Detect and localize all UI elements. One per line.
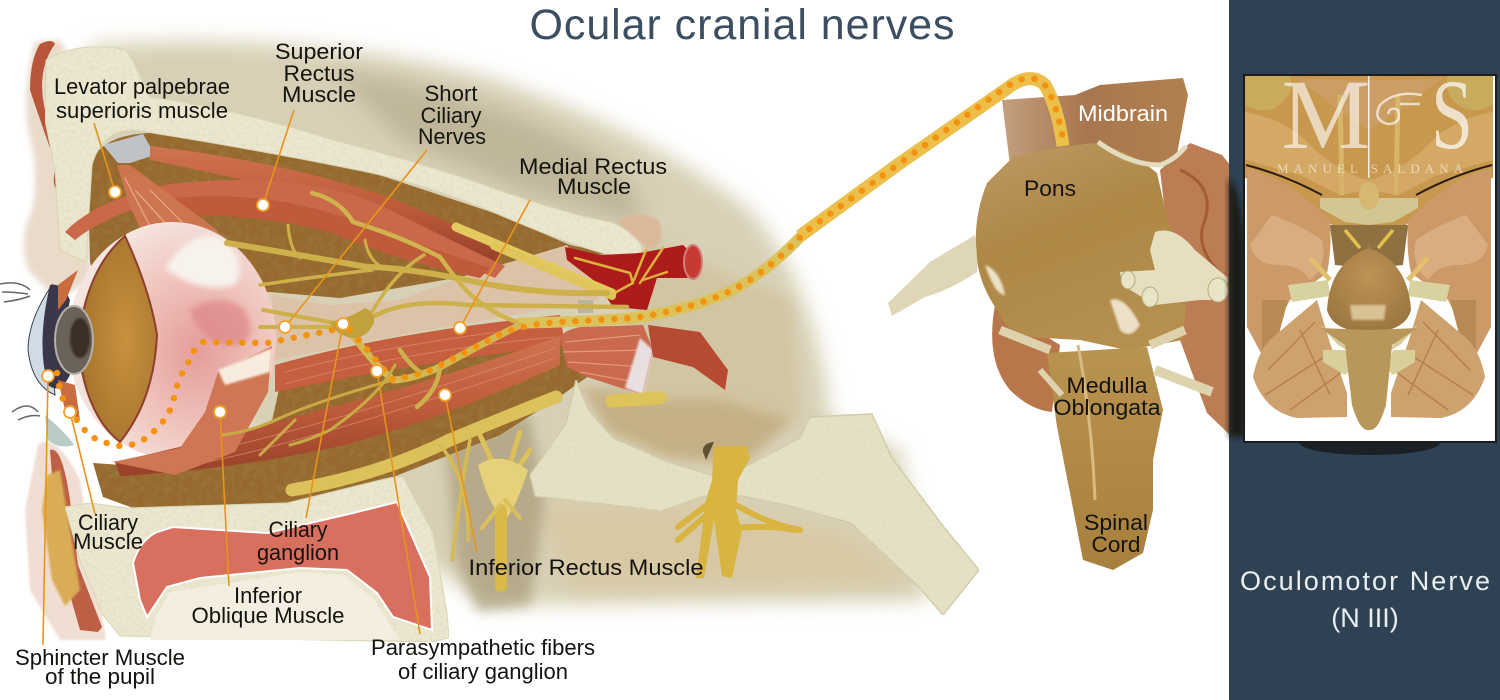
label: inferior oblique: Inferior: [234, 583, 302, 608]
medulla and spinal cord: [1047, 347, 1163, 570]
label: medulla: Medulla: [1066, 373, 1148, 398]
eyelid muscle strip: [30, 41, 60, 190]
leader: short ciliary: [279, 150, 427, 333]
ciliary ganglion: [330, 308, 374, 338]
leader: superior rectus: [257, 110, 294, 211]
label: superior rectus: Rectus: [284, 61, 354, 86]
eyeball sclera: [68, 222, 276, 458]
label: levator: superioris muscle: [56, 98, 228, 123]
left nerve: [888, 235, 977, 316]
label: parasympathetic: of ciliary ganglion: [398, 659, 568, 684]
inferior oblique muscle: [112, 346, 272, 475]
label: medial rectus: Medial Rectus: [519, 154, 667, 179]
ciliary body: [58, 270, 80, 420]
muscle streaks: [150, 325, 555, 468]
superior levator muscle: [150, 146, 505, 262]
label: levator: Levator palpebrae: [54, 74, 230, 99]
leader: parasympathetic fibers: [371, 365, 420, 634]
sand below sphenoid: [540, 505, 915, 590]
eyelashes: [0, 283, 40, 420]
upper orbital fat: [88, 133, 610, 300]
bottom shadow: [1300, 431, 1440, 455]
leader: medial rectus: [454, 200, 530, 334]
iris: [42, 285, 70, 388]
maxillary sinus: [133, 502, 432, 630]
brain photo: [1245, 76, 1493, 430]
label: superior rectus: Muscle: [282, 82, 356, 107]
lower face tissue: [25, 442, 106, 640]
lower orbital fat: [93, 335, 590, 508]
sphenoid bone: [530, 380, 979, 615]
clip: [578, 300, 593, 313]
title: Ocular cranial nerves: [530, 1, 954, 49]
leader: inferior rectus: [439, 389, 477, 552]
label: short ciliary: Nerves: [418, 124, 486, 149]
star nerve: [678, 446, 800, 578]
label: short ciliary: Short: [424, 81, 478, 106]
lower lid muscle: [50, 450, 102, 632]
fan tendon: [625, 338, 653, 395]
watermark M: M: [1282, 59, 1370, 170]
superior tendon: [103, 134, 155, 163]
cut interior: [78, 236, 157, 442]
oculomotor nerve yellow cord: [800, 79, 1063, 236]
tear gland: [45, 415, 74, 447]
superior rectus muscle: [175, 196, 490, 278]
muscle strap: [648, 325, 728, 390]
artery opening: [684, 245, 702, 279]
leader: ciliary muscle: [64, 406, 95, 514]
label: medulla: Oblongata: [1054, 395, 1161, 420]
infraorbital root: [478, 432, 530, 586]
cord midline: [1078, 345, 1095, 500]
watermark name: MANUEL SALDANA: [1277, 161, 1464, 176]
label: medial rectus: Muscle: [557, 174, 631, 199]
label: ciliary muscle: Ciliary: [78, 510, 138, 535]
skull background haze: [90, 41, 930, 605]
superior muscle belly: [117, 165, 222, 268]
label: ciliary ganglion: ganglion: [257, 540, 339, 565]
pons highlight: [1350, 305, 1386, 320]
cornea: [28, 285, 55, 395]
lower dark shadow: [445, 415, 545, 612]
label: inferior oblique: Oblique Muscle: [192, 603, 344, 628]
label: parasympathetic: Parasympathetic fibers: [371, 635, 595, 660]
pale tissue band: [272, 245, 600, 360]
cerebellum right: [1160, 143, 1230, 435]
side panel: [1229, 0, 1500, 700]
pterygoid stub: [612, 398, 660, 401]
eye red vessels: [190, 300, 251, 345]
ciliary nerve branches: [222, 193, 627, 455]
lateral rectus muscle: [275, 315, 565, 392]
label: sphincter: of the pupil: [45, 664, 155, 689]
oblique muscle white fade: [218, 348, 272, 385]
panel shadow: [1229, 178, 1245, 437]
watermark S: S: [1431, 59, 1473, 170]
panel caption: Oculomotor Nerve: [1240, 566, 1490, 596]
leader: sphincter: [42, 370, 54, 645]
trochlear nerve: [1098, 142, 1186, 165]
midbrain: [1002, 78, 1188, 165]
fan streaks: [563, 335, 645, 383]
illustration: orbit anatomy: [0, 40, 979, 642]
lower nerve: [292, 397, 556, 490]
pons centre: [1327, 248, 1411, 332]
label: sphincter: Sphincter Muscle: [15, 645, 185, 670]
label: superior rectus: Superior: [275, 39, 363, 64]
label: short ciliary: Ciliary: [420, 103, 482, 128]
label: midbrain: Midbrain: [1078, 101, 1168, 126]
muscle fibres: [125, 178, 205, 255]
lens: [55, 306, 93, 374]
muscle fan: [560, 325, 653, 395]
leader: inferior oblique: [214, 406, 229, 586]
sand behind muscles: [600, 240, 800, 465]
nerve tubes: [456, 227, 612, 296]
label: spinal cord: Spinal: [1084, 510, 1148, 535]
levator band: [65, 180, 505, 278]
panel caption: (N III): [1331, 603, 1399, 633]
cerebellum lower: [992, 305, 1060, 412]
label: pons: Pons: [1024, 176, 1076, 201]
parasympathetic dotted pathway: [57, 78, 1064, 446]
lower bone: [65, 477, 449, 642]
pontine nerves: [1000, 330, 1185, 350]
trigeminal nerve: [1120, 230, 1228, 305]
label: inferior rectus: Inferior Rectus Muscle: [468, 555, 704, 580]
tissue blob behind bone: [617, 214, 662, 250]
white fade below sinus: [150, 572, 400, 640]
watermark swirl: [1377, 94, 1422, 124]
inferior rectus muscle: [115, 336, 560, 476]
nerve ends: [1121, 271, 1228, 307]
brain photo frame: [1244, 75, 1496, 442]
skin profile: [24, 40, 100, 300]
upper bone: [45, 47, 642, 262]
brown sand above sphenoid: [580, 385, 790, 462]
sphincter yellow gland: [42, 470, 80, 606]
artery: [565, 245, 702, 310]
label: ciliary ganglion: Ciliary: [268, 517, 328, 542]
label: spinal cord: Cord: [1092, 532, 1140, 557]
highlights: [985, 265, 1140, 334]
brainstem: [888, 78, 1230, 570]
grey shadow above the bone: [330, 70, 641, 225]
thin nerves: [440, 440, 470, 560]
midline fold: [1368, 76, 1370, 178]
dark notch: [703, 442, 714, 460]
leader: levator: [94, 123, 121, 198]
oculomotor thick nerve: [520, 232, 805, 323]
label: ciliary muscle: Muscle: [73, 529, 143, 554]
pons: [976, 143, 1187, 350]
leader: ciliary ganglion: [306, 318, 349, 518]
artery branches: [575, 248, 667, 297]
tendon fade: [165, 236, 240, 288]
medulla centre: [1320, 328, 1418, 430]
